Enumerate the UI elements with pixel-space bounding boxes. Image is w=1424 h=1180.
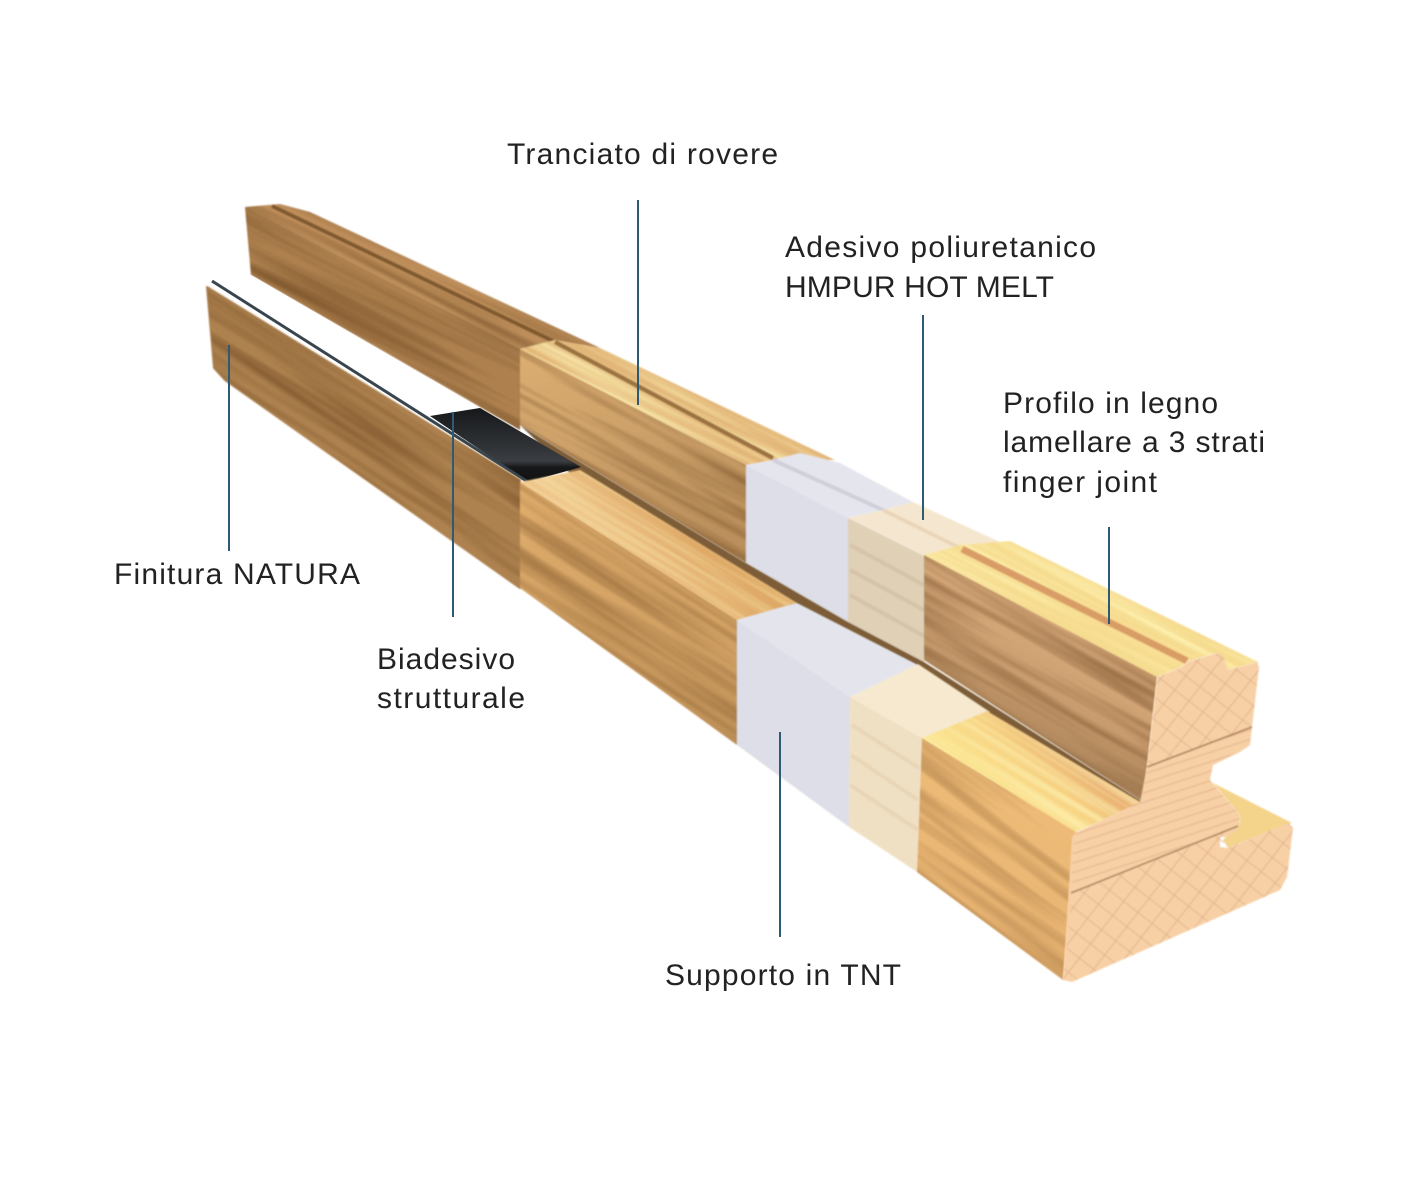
upper beam: adhesive band [848,502,1013,662]
lower rear top strip of the profile [1213,783,1292,848]
upper beam: finger-joint laminated wood [923,540,1258,800]
leader line: Profilo in legno [1108,527,1110,624]
lower beam: oak raw section [519,469,797,746]
label: Profilo in legno lamellare a 3 strati finger joint: finger joint [1003,466,1158,499]
lower frame beam [205,285,1292,980]
label: Finitura NATURA: Finitura NATURA [114,558,360,591]
label: Profilo in legno lamellare a 3 strati finger joint [1003,387,1265,499]
label: Profilo in legno lamellare a 3 strati finger joint: lamellare a 3 strati [1003,426,1265,459]
label: Adesivo poliuretanico HMPUR HOT MELT: Adesivo poliuretanico [785,231,1096,264]
upper profile beam [244,203,1258,800]
leader line: Finitura NATURA [228,345,230,551]
upper beam: oak veneer finished left section [244,203,600,431]
label: Adesivo poliuretanico HMPUR HOT MELT: HMPUR HOT MELT [785,271,1054,304]
lower beam: adhesive band [849,664,990,872]
leader line: Adesivo poliuretanico [922,315,924,520]
lower beam: oak finished left section [205,285,522,590]
leader line: Biadesivo strutturale [452,412,454,617]
label: Adesivo poliuretanico HMPUR HOT MELT [785,231,1096,304]
diagram: laminated wood door frame profile with labels [116,142,1294,991]
label: Biadesivo strutturale [377,643,525,715]
gap shadow between beams [520,425,1143,812]
lower beam: TNT support band [737,603,918,827]
upper beam: oak veneer raw section [519,339,835,563]
end cap: profile cross-section [1063,653,1293,982]
leader line: Supporto in TNT [779,732,781,937]
label: Tranciato di rovere: Tranciato di rovere [507,138,778,171]
label: Profilo in legno lamellare a 3 strati finger joint: Profilo in legno [1003,387,1218,420]
leader line: Tranciato di rovere [637,200,639,405]
label: Biadesivo strutturale: strutturale [377,682,525,715]
upper beam: TNT support band [746,453,913,622]
label: Supporto in TNT: Supporto in TNT [665,959,901,992]
black structural double-sided tape [212,281,581,482]
label: Biadesivo strutturale: Biadesivo [377,643,515,676]
white release liner of the adhesive [212,275,480,415]
lower beam: laminated wood [916,710,1140,980]
